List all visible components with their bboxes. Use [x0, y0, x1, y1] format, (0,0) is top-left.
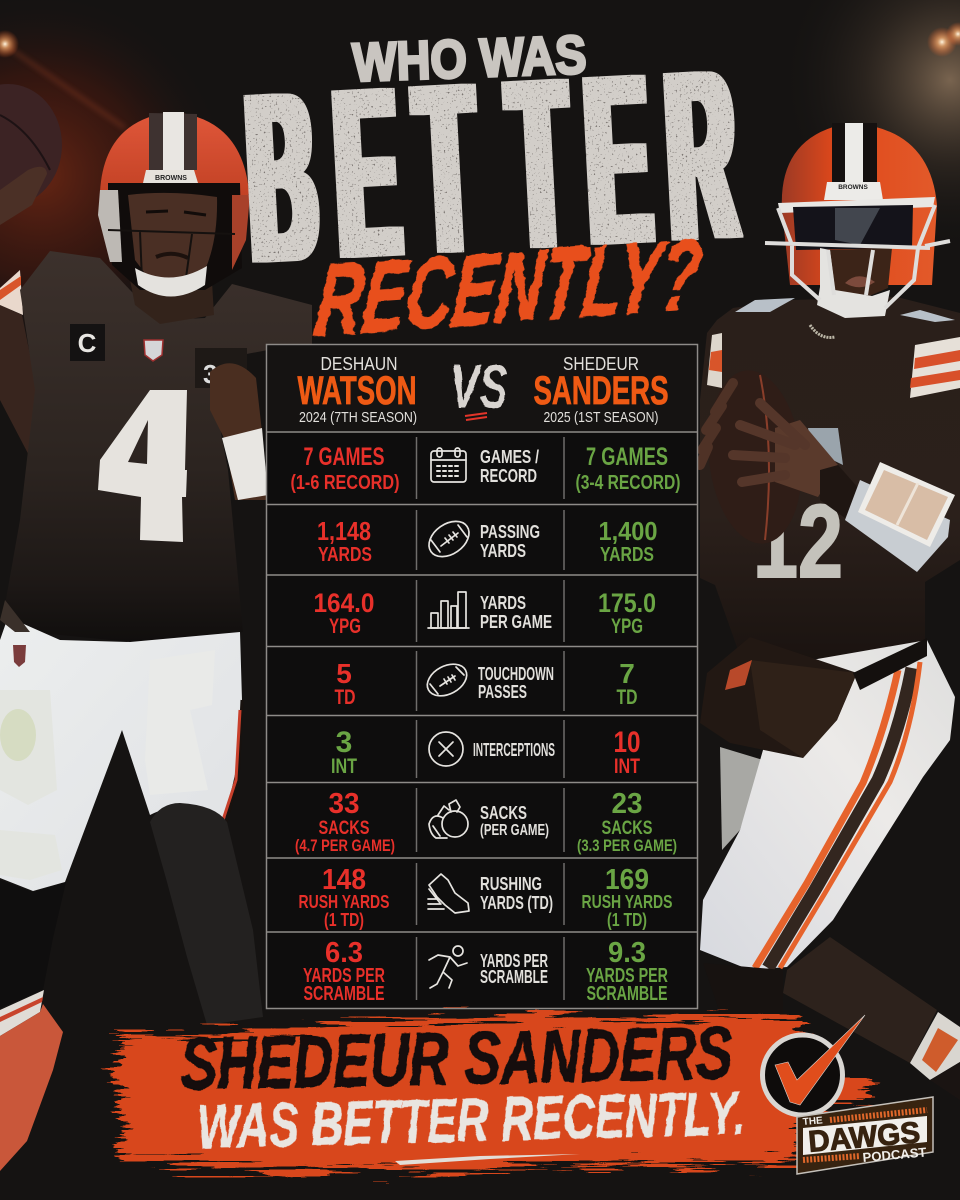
row: yards per scramble: SCRAMBLE [480, 967, 548, 987]
row: passing yards: YARDS [318, 544, 372, 566]
row: passing yards [317, 514, 658, 566]
pants stripes [755, 662, 920, 968]
row: rushing yards: (1 TD) [607, 910, 647, 930]
row: yards per game: PER GAME [480, 612, 552, 632]
row: touchdown passes: TOUCHDOWN [478, 664, 554, 684]
logo the: THE [802, 1115, 824, 1128]
header: Sanders: SANDERS [534, 369, 668, 413]
helmet: BROWNS [155, 175, 187, 182]
row: sacks [295, 788, 677, 855]
orange brush stroke [118, 1015, 872, 1172]
icon: loot sack [429, 800, 468, 838]
icon: football [422, 514, 476, 564]
sleeve stripes [910, 337, 960, 398]
row: sacks: SACKS [602, 818, 652, 839]
header: Sanders: 2025 (1ST SEASON) [544, 410, 658, 426]
podcast logo [797, 1097, 933, 1174]
icon: football [422, 658, 472, 702]
throwing arm [0, 270, 36, 465]
header: Sanders: SHEDEUR [563, 354, 639, 374]
lower leg [0, 880, 66, 1008]
pants stripe [223, 700, 242, 822]
row: sacks: (3.3 PER GAME) [577, 836, 677, 855]
icon: runner [429, 946, 467, 988]
title: better: BETTER [242, 19, 741, 313]
table header band [268, 346, 696, 431]
row: interceptions: INTERCEPTIONS [473, 740, 555, 760]
row: sacks: (PER GAME) [480, 822, 549, 839]
wrist coach card [858, 462, 955, 547]
row: interceptions: 10 [614, 726, 640, 759]
row: games: (3-4 RECORD) [576, 472, 680, 494]
row: rushing yards: 148 [322, 864, 366, 896]
thigh pad [145, 650, 215, 795]
lower leg [783, 937, 937, 1063]
row: passing yards: 1,400 [598, 516, 658, 546]
logo dawgs: DAWGS [807, 1116, 921, 1159]
row: rushing yards: RUSH YARDS [298, 892, 390, 912]
row: rushing yards: 169 [605, 864, 649, 896]
row: games [290, 443, 680, 494]
row: games: GAMES / [480, 447, 539, 467]
icon: x in circle [429, 732, 463, 766]
title: who was: WHO WAS [351, 25, 587, 93]
jersey patch above wrist [808, 428, 843, 465]
logo podcast: PODCAST [862, 1144, 927, 1165]
row: rushing yards: (1 TD) [324, 910, 364, 930]
jersey [5, 251, 312, 642]
forearm and wristband [210, 363, 268, 500]
row: yards per scramble: 6.3 [325, 937, 363, 969]
row and column rules [266, 432, 697, 1000]
forearm sleeve [820, 465, 860, 518]
sock stripes [910, 1012, 960, 1100]
row: yards per scramble: 9.3 [608, 937, 646, 969]
sleeve number [195, 348, 247, 389]
leg [150, 803, 263, 1025]
row: passing yards: YARDS [480, 541, 526, 561]
rear leg [720, 747, 763, 850]
row: rushing yards: RUSH YARDS [582, 892, 672, 912]
row: passing yards: 1,148 [317, 516, 371, 546]
necklace [810, 325, 835, 338]
row: touchdown passes: PASSES [478, 682, 527, 702]
verdict line two: WAS BETTER RECENTLY. [197, 1079, 746, 1161]
row: rushing yards: YARDS (TD) [480, 893, 553, 913]
header: Watson: DESHAUN [320, 354, 398, 374]
verdict banner [118, 1011, 872, 1172]
row: touchdown passes: TD [334, 686, 356, 709]
row: sacks: 33 [328, 788, 360, 820]
player: Deshaun Watson [0, 84, 312, 1171]
row: yards per game: YPG [611, 615, 643, 638]
throwing hand left fingers [700, 383, 733, 465]
logo white panel [803, 1116, 927, 1155]
header: Watson: WATSON [298, 369, 416, 413]
row: yards per scramble: SCRAMBLE [304, 983, 384, 1005]
NFL shield [144, 340, 163, 361]
versus mark: VS [450, 353, 508, 422]
header: Sanders [534, 354, 668, 426]
row: games: (1-6 RECORD) [290, 472, 400, 494]
row: interceptions [331, 726, 640, 778]
football in raised hand [0, 84, 62, 225]
header: Watson: 2024 (7TH SEASON) [299, 410, 417, 426]
row: yards per game: YARDS [480, 593, 526, 613]
row: interceptions: 3 [336, 726, 352, 759]
neck [130, 280, 214, 324]
left sleeve stripes [707, 333, 722, 388]
row: yards per scramble: YARDS PER [480, 951, 548, 971]
jersey number 12: 12 [753, 484, 843, 600]
football [700, 366, 810, 548]
jersey number 4 [98, 390, 187, 542]
captain patch: C [78, 328, 97, 358]
captain patch [70, 324, 105, 361]
row: yards per scramble: YARDS PER [303, 965, 385, 987]
row: interceptions: INT [614, 755, 640, 778]
row: passing yards: PASSING [480, 522, 540, 542]
row: games: 7 GAMES [586, 443, 668, 471]
row: yards per game: YPG [329, 615, 361, 638]
underline stroke [395, 1154, 580, 1165]
helmet [765, 123, 950, 318]
knee pads [0, 690, 62, 880]
player: Shedeur Sanders [700, 123, 960, 1100]
row: yards per game: 175.0 [598, 588, 656, 618]
pad stain [0, 709, 36, 761]
icon: bar chart [428, 592, 469, 628]
row: touchdown passes [334, 658, 638, 709]
row: yards per scramble: YARDS PER [586, 965, 668, 987]
row: rushing yards [298, 864, 672, 930]
pants [700, 640, 955, 970]
row: touchdown passes: 5 [336, 658, 352, 689]
comparison table [266, 344, 698, 1008]
table panel [266, 344, 698, 1008]
row: rushing yards: RUSHING [480, 874, 542, 894]
shoulder numbers [735, 298, 955, 322]
jersey [700, 297, 960, 662]
icon: running shoe [428, 874, 469, 913]
row: yards per game: 164.0 [314, 588, 374, 618]
wristband [845, 480, 950, 572]
row: sacks: SACKS [480, 803, 527, 823]
title: recently: RECENTLY? [311, 218, 707, 357]
row: interceptions: INT [331, 755, 357, 778]
verdict line one: SHEDEUR SANDERS [180, 1011, 733, 1106]
cleat [0, 1004, 63, 1171]
row: sacks: 23 [612, 788, 642, 820]
pants [0, 617, 242, 891]
helmet: BROWNS [838, 184, 868, 191]
row: yards per scramble: SCRAMBLE [586, 983, 668, 1005]
front lower leg [703, 963, 783, 1013]
sleeve number: 3 [203, 359, 217, 389]
row: sacks: SACKS [318, 818, 370, 839]
sock [0, 990, 44, 1036]
waist bag [700, 637, 927, 758]
helmet [98, 112, 250, 296]
right hand [733, 403, 838, 497]
icon: calendar [431, 448, 466, 482]
row: yards per game [314, 588, 656, 638]
stadium light flare left [0, 30, 19, 58]
row: passing yards: YARDS [600, 544, 654, 566]
row: sacks: (4.7 PER GAME) [295, 836, 395, 855]
waist shadow and logo [0, 600, 30, 667]
row: games: 7 GAMES [304, 443, 384, 471]
row: touchdown passes: TD [616, 686, 638, 709]
stadium light flare right [927, 22, 960, 57]
row: touchdown passes: 7 [619, 658, 635, 689]
checkmark badge [762, 1015, 865, 1115]
row: games: RECORD [480, 466, 537, 486]
header: Watson [298, 354, 417, 426]
logo eq bars [803, 1110, 927, 1160]
row: yards per scramble [303, 937, 668, 1005]
